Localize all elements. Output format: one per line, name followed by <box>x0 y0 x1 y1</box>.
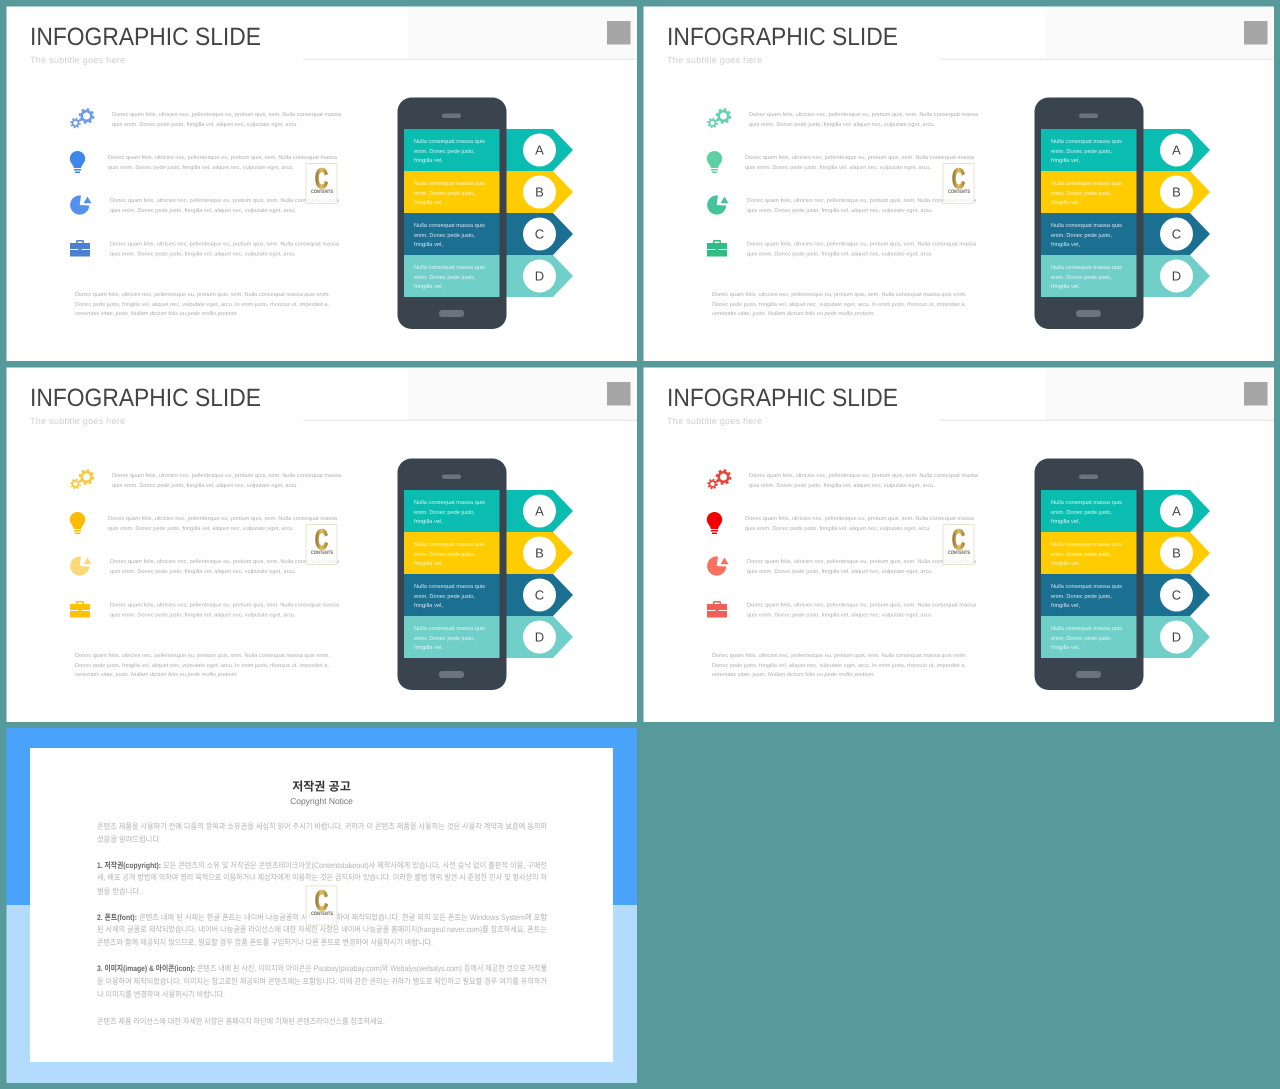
text block: summary <box>712 653 967 678</box>
watermark logo: C <box>315 163 328 194</box>
text block: row 1: Donec quam felis, ultricies nec, pellentesque eu, pretium quis, sem. Nulla consequat massa <box>112 112 341 118</box>
text block: row 3: Donec quam felis, ultricies nec, pellentesque eu, pretium quis, sem. Nulla consequat massa <box>747 198 976 204</box>
text block: row 4: Donec quam felis, ultricies nec, pellentesque eu, pretium quis, sem. Nulla consequat massa <box>110 242 339 248</box>
icon: light bulb <box>70 512 85 534</box>
notice section 3: 3. 이미지(image) & 아이콘(icon): <box>97 964 195 973</box>
text block: row 4 <box>110 602 339 618</box>
text block: row 1 <box>749 112 978 128</box>
phone: fringilla vel, <box>1051 283 1080 290</box>
arrow tabs A-D: B <box>1172 184 1181 200</box>
notice section 2: 된 서체의 글꼴로 제작되었습니다. 네이버 나눔글꼴 라이선스에 대한 자세한 사항은 네이버 나눔글꼴 홈페이지(hangeul.naver.com)를 참조하세요. 폰트는 <box>97 925 547 934</box>
text block: row 4: Donec quam felis, ultricies nec, pellentesque eu, pretium quis, sem. Nulla consequat massa <box>747 242 976 248</box>
subtitle: The subtitle goes here <box>30 416 125 426</box>
text block: row 2 <box>108 155 337 171</box>
arrow tabs A-D: D <box>535 630 544 644</box>
text block: row 1 <box>112 473 341 489</box>
watermark logo: C <box>315 885 328 916</box>
text block: row 2: quis enim. Donec pede justo, fringilla vel, aliquet nec, vulputate eget, arcu. <box>745 526 931 532</box>
phone: Nulla consequat massa quis <box>414 264 485 271</box>
notice subheading: Copyright Notice <box>290 796 353 806</box>
corner square <box>1244 21 1268 44</box>
phone: Nulla consequat massa quis <box>414 499 485 506</box>
text block: row 3: Donec quam felis, ultricies nec, pellentesque eu, pretium quis, sem. Nulla consequat massa <box>110 559 339 565</box>
corner square <box>1244 382 1268 406</box>
icon: gears <box>708 470 730 488</box>
text block: row 4: Donec quam felis, ultricies nec, pellentesque eu, pretium quis, sem. Nulla consequat massa <box>110 602 339 608</box>
text block: row 3 <box>110 198 339 214</box>
text block: row 2: Donec quam felis, ultricies nec, pellentesque eu, pretium quis, sem. Nulla consequat massa <box>108 155 337 161</box>
text block: summary: venenatis vitae, justo. Nullam dictum felis eu pede mollis pretium. <box>75 672 238 678</box>
arrow tabs A-D <box>500 129 573 297</box>
phone: enim. Donec pede justo, <box>1051 509 1112 516</box>
watermark logo: CONTENTS <box>948 189 971 195</box>
notice section 2: 2. 폰트(font): <box>97 913 137 922</box>
text block: row 1: quis enim. Donec pede justo, fringilla vel, aliquet nec, vulputate eget, arcu. <box>112 483 298 489</box>
corner square <box>607 382 630 406</box>
title: INFOGRAPHIC SLIDE <box>30 23 261 51</box>
notice section 3 <box>97 964 547 999</box>
phone: fringilla vel, <box>414 560 443 567</box>
phone: enim. Donec pede justo, <box>1051 148 1112 155</box>
notice intro: 콘텐츠 제품을 사용하기 전에 다음의 항목과 소유권을 세심히 읽어 주시기 바랍니다. 귀하가 이 콘텐츠 제품을 사용하는 것은 사용자 계약과 보증에 동의하 <box>97 822 548 831</box>
text block: row 4: Donec quam felis, ultricies nec, pellentesque eu, pretium quis, sem. Nulla consequat massa <box>747 602 976 608</box>
watermark logo <box>306 163 337 204</box>
arrow tabs A-D: B <box>1172 546 1181 560</box>
phone: enim. Donec pede justo, <box>414 232 475 239</box>
phone: Nulla consequat massa quis <box>1051 264 1122 271</box>
text block: row 4 <box>110 242 339 258</box>
arrow tabs A-D: A <box>1172 504 1181 518</box>
text block: row 1: Donec quam felis, ultricies nec, pellentesque eu, pretium quis, sem. Nulla consequat massa <box>112 473 341 479</box>
text block: summary <box>75 653 330 678</box>
text block: row 3 <box>747 559 976 575</box>
icon: light bulb <box>70 151 85 173</box>
arrow tabs A-D: D <box>1172 630 1181 644</box>
phone: enim. Donec pede justo, <box>414 190 475 197</box>
icon: pie chart <box>70 195 92 215</box>
phone <box>398 458 506 690</box>
text block: summary: Donec pede justo, fringilla vel, aliquet nec, vulputate eget, arcu. In enim justo, rhoncus ut, imperdiet a, <box>712 302 967 308</box>
arrow tabs A-D: D <box>535 268 544 284</box>
notice section 3: 콘텐츠 내에 된 사진, 이미지와 아이콘은 Pixabay(pixabay.com)와 Webalys(webalys.com) 등에서 제공한 것으로 저작물 <box>197 964 547 973</box>
phone: Nulla consequat massa quis <box>414 180 485 187</box>
slide 1: blue icons <box>6 6 637 361</box>
phone: enim. Donec pede justo, <box>1051 551 1112 558</box>
text block: summary: Donec quam felis, ultricies nec, pellentesque eu, pretium quis, sem. Nulla consequat massa quis enim. <box>712 653 967 659</box>
text block: row 2: quis enim. Donec pede justo, fringilla vel, aliquet nec, vulputate eget, arcu. <box>745 165 931 171</box>
slide 2: green icons <box>644 6 1274 361</box>
phone: Nulla consequat massa quis <box>1051 625 1122 632</box>
text block: row 2: Donec quam felis, ultricies nec, pellentesque eu, pretium quis, sem. Nulla consequat massa <box>745 516 974 522</box>
subtitle: The subtitle goes here <box>30 55 125 65</box>
phone: fringilla vel, <box>1051 602 1080 609</box>
phone: enim. Donec pede justo, <box>1051 593 1112 600</box>
arrow tabs A-D: A <box>1172 142 1181 158</box>
notice section 1: 세, 배포 공개 방법에 의하여 영리 목적으로 이용하거나 제삼자에게 이용하는 것은 금지되어 있습니다. 이러한 불법 행위 발견 시 준엄한 민사 및 형사상의 처 <box>97 873 547 882</box>
text block: summary: venenatis vitae, justo. Nullam dictum felis eu pede mollis pretium. <box>75 311 238 317</box>
icon: pie chart <box>70 556 92 576</box>
text block: row 1 <box>749 473 978 489</box>
icon: light bulb <box>707 151 722 173</box>
text block: row 3: quis enim. Donec pede justo, fringilla vel, aliquet nec, vulputate eget, arcu. <box>747 569 933 575</box>
arrow tabs A-D: A <box>535 142 544 158</box>
panel: copyright notice <box>6 728 637 1083</box>
phone: enim. Donec pede justo, <box>1051 190 1112 197</box>
watermark logo: C <box>952 524 965 555</box>
slide 4: red icons <box>644 368 1274 722</box>
notice heading: 저작권 공고 <box>292 780 351 794</box>
phone: fringilla vel, <box>414 199 443 206</box>
arrow tabs A-D: B <box>535 546 544 560</box>
icon: gears <box>71 109 93 128</box>
watermark logo <box>943 163 974 204</box>
arrow tabs A-D <box>1137 129 1210 297</box>
arrow tabs A-D <box>500 490 573 658</box>
phone: Nulla consequat massa quis <box>1051 222 1122 229</box>
arrow tabs A-D: C <box>535 226 544 242</box>
phone: Nulla consequat massa quis <box>414 541 485 548</box>
phone: fringilla vel, <box>1051 644 1080 651</box>
text block: row 2: Donec quam felis, ultricies nec, pellentesque eu, pretium quis, sem. Nulla consequat massa <box>108 516 337 522</box>
phone: enim. Donec pede justo, <box>414 593 475 600</box>
text block: summary: Donec quam felis, ultricies nec, pellentesque eu, pretium quis, sem. Nulla consequat massa quis enim. <box>75 653 330 659</box>
text block: row 3 <box>110 559 339 575</box>
text block: summary: Donec pede justo, fringilla vel, aliquet nec, vulputate eget, arcu. In enim justo, rhoncus ut, imperdiet a, <box>75 663 330 669</box>
text block: row 1: quis enim. Donec pede justo, fringilla vel, aliquet nec, vulputate eget, arcu. <box>749 483 935 489</box>
subtitle: The subtitle goes here <box>667 416 762 426</box>
slide 3: yellow icons <box>6 368 637 722</box>
watermark logo: CONTENTS <box>311 550 334 556</box>
arrow tabs A-D: C <box>535 588 544 602</box>
phone: fringilla vel, <box>414 602 443 609</box>
watermark logo: C <box>952 163 965 194</box>
notice section 3: 을 이용하여 제작되었습니다. 이미지는 참고로만 제공되며 콘텐츠에는 포함됩니다. 이에 관한 권리는 귀하가 별도로 확인하고 필요할 경우 여기를 유의하거 <box>97 977 547 986</box>
notice intro <box>97 822 548 844</box>
text block: row 1: quis enim. Donec pede justo, fringilla vel, aliquet nec, vulputate eget, arcu. <box>749 122 935 128</box>
icon: pie chart <box>707 195 728 215</box>
phone: fringilla vel, <box>414 157 443 164</box>
phone: enim. Donec pede justo, <box>414 148 475 155</box>
text block: row 3: Donec quam felis, ultricies nec, pellentesque eu, pretium quis, sem. Nulla consequat massa <box>110 198 339 204</box>
phone: enim. Donec pede justo, <box>1051 232 1112 239</box>
text block: row 4 <box>747 242 976 258</box>
arrow tabs A-D <box>1137 490 1210 658</box>
icon: pie chart <box>707 556 728 576</box>
text block: row 2 <box>108 516 337 532</box>
arrow tabs A-D: B <box>535 184 544 200</box>
subtitle: The subtitle goes here <box>667 55 762 65</box>
watermark logo <box>943 524 974 564</box>
watermark logo: CONTENTS <box>311 911 334 917</box>
phone: enim. Donec pede justo, <box>1051 274 1112 281</box>
title: INFOGRAPHIC SLIDE <box>30 384 261 412</box>
watermark logo <box>306 885 337 925</box>
phone: Nulla consequat massa quis <box>414 625 485 632</box>
text block: summary <box>712 292 967 317</box>
phone <box>1034 458 1144 690</box>
watermark logo: C <box>315 524 328 555</box>
phone: Nulla consequat massa quis <box>414 583 485 590</box>
notice section 1: 모든 콘텐츠의 소유 및 저작권은 콘텐츠테이크아웃(Contentstakeout)사 제작사에게 있습니다. 사전 승낙 없이 출판적 이용, 구매전 <box>163 861 547 870</box>
phone: fringilla vel, <box>414 644 443 651</box>
notice intro: 셨음을 알려드립니다. <box>97 835 161 844</box>
notice section 1: 벌을 받습니다. <box>97 887 141 896</box>
phone: fringilla vel, <box>1051 241 1080 248</box>
text block: row 4: quis enim. Donec pede justo, fringilla vel, aliquet nec, vulputate eget, arcu. <box>747 612 933 618</box>
text block: row 4: quis enim. Donec pede justo, fringilla vel, aliquet nec, vulputate eget, arcu. <box>110 252 296 258</box>
phone: Nulla consequat massa quis <box>1051 180 1122 187</box>
arrow tabs A-D: C <box>1172 226 1181 242</box>
icon: gears <box>71 470 93 488</box>
phone <box>398 98 506 329</box>
text block: row 3: quis enim. Donec pede justo, fringilla vel, aliquet nec, vulputate eget, arcu. <box>110 569 296 575</box>
notice section 1 <box>97 861 547 896</box>
arrow tabs A-D: C <box>1172 588 1181 602</box>
phone: Nulla consequat massa quis <box>1051 583 1122 590</box>
notice section 2: 콘텐츠와 함께 제공되지 않으므로, 필요할 경우 정품 폰트를 구입하거나 다른 폰트로 변경하여 사용하시기 바랍니다. <box>97 938 433 947</box>
icon: briefcase <box>70 240 90 256</box>
phone: fringilla vel, <box>1051 518 1080 525</box>
corner square <box>607 21 630 44</box>
phone: enim. Donec pede justo, <box>414 274 475 281</box>
text block: row 4 <box>747 602 976 618</box>
text block: summary: Donec quam felis, ultricies nec, pellentesque eu, pretium quis, sem. Nulla consequat massa quis enim. <box>712 292 967 298</box>
text block: row 4: quis enim. Donec pede justo, fringilla vel, aliquet nec, vulputate eget, arcu. <box>747 252 933 258</box>
text block: summary <box>75 292 330 317</box>
text block: row 3: quis enim. Donec pede justo, fringilla vel, aliquet nec, vulputate eget, arcu. <box>747 208 933 214</box>
text block: row 3: Donec quam felis, ultricies nec, pellentesque eu, pretium quis, sem. Nulla consequat massa <box>747 559 976 565</box>
phone: enim. Donec pede justo, <box>414 635 475 642</box>
phone: fringilla vel, <box>1051 560 1080 567</box>
text block: row 1: quis enim. Donec pede justo, fringilla vel, aliquet nec, vulputate eget, arcu. <box>112 122 298 128</box>
watermark logo: CONTENTS <box>311 189 334 195</box>
title: INFOGRAPHIC SLIDE <box>667 384 898 412</box>
text block: row 1: Donec quam felis, ultricies nec, pellentesque eu, pretium quis, sem. Nulla consequat massa <box>749 112 978 118</box>
text block: row 3 <box>747 198 976 214</box>
phone: fringilla vel, <box>414 283 443 290</box>
phone: Nulla consequat massa quis <box>1051 138 1122 145</box>
icon: gears <box>708 109 730 128</box>
text block: summary: venenatis vitae, justo. Nullam dictum felis eu pede mollis pretium. <box>712 311 875 317</box>
icon: briefcase <box>707 240 727 256</box>
text block: summary: Donec pede justo, fringilla vel, aliquet nec, vulputate eget, arcu. In enim justo, rhoncus ut, imperdiet a, <box>75 302 330 308</box>
phone: enim. Donec pede justo, <box>414 551 475 558</box>
notice closing line: 콘텐츠 제품 라이선스에 대한 자세한 사항은 홈페이지 하단에 기재된 콘텐츠라이선스를 참조하세요. <box>97 1017 385 1026</box>
phone: enim. Donec pede justo, <box>1051 635 1112 642</box>
phone: Nulla consequat massa quis <box>1051 499 1122 506</box>
notice section 3: 나 이미지를 변경하여 사용하시기 바랍니다. <box>97 990 225 999</box>
phone <box>1034 98 1144 329</box>
phone: Nulla consequat massa quis <box>414 138 485 145</box>
title: INFOGRAPHIC SLIDE <box>667 23 898 51</box>
notice section 2 <box>97 913 548 947</box>
text block: summary: Donec quam felis, ultricies nec, pellentesque eu, pretium quis, sem. Nulla consequat massa quis enim. <box>75 292 330 298</box>
phone: fringilla vel, <box>1051 157 1080 164</box>
phone: enim. Donec pede justo, <box>414 509 475 516</box>
text block: row 2 <box>745 516 974 532</box>
notice section 1: 1. 저작권(copyright): <box>97 861 161 870</box>
phone: Nulla consequat massa quis <box>414 222 485 229</box>
notice section 2: 콘텐츠 내에 된 서체는 한글 폰트는 네이버 나눔글꼴의 서체를 사용하여 제작되었습니다. 한글 외의 모든 폰트는 Windows System에 포함 <box>139 913 548 922</box>
text block: row 4: quis enim. Donec pede justo, fringilla vel, aliquet nec, vulputate eget, arcu. <box>110 612 296 618</box>
text block: row 2 <box>745 155 974 171</box>
arrow tabs A-D: D <box>1172 268 1181 284</box>
phone: fringilla vel, <box>1051 199 1080 206</box>
text block: summary: Donec pede justo, fringilla vel, aliquet nec, vulputate eget, arcu. In enim justo, rhoncus ut, imperdiet a, <box>712 663 967 669</box>
phone: fringilla vel, <box>414 518 443 525</box>
text block: row 2: quis enim. Donec pede justo, fringilla vel, aliquet nec, vulputate eget, arcu. <box>108 526 294 532</box>
text block: row 1: Donec quam felis, ultricies nec, pellentesque eu, pretium quis, sem. Nulla consequat massa <box>749 473 978 479</box>
text block: row 3: quis enim. Donec pede justo, fringilla vel, aliquet nec, vulputate eget, arcu. <box>110 208 296 214</box>
text block: row 2: Donec quam felis, ultricies nec, pellentesque eu, pretium quis, sem. Nulla consequat massa <box>745 155 974 161</box>
phone: Nulla consequat massa quis <box>1051 541 1122 548</box>
icon: briefcase <box>707 601 727 618</box>
icon: light bulb <box>707 512 722 534</box>
watermark logo <box>306 524 337 564</box>
icon: briefcase <box>70 601 90 618</box>
watermark logo: CONTENTS <box>948 550 971 556</box>
phone: fringilla vel, <box>414 241 443 248</box>
arrow tabs A-D: A <box>535 504 544 518</box>
text block: row 2: quis enim. Donec pede justo, fringilla vel, aliquet nec, vulputate eget, arcu. <box>108 165 294 171</box>
text block: row 1 <box>112 112 341 128</box>
text block: summary: venenatis vitae, justo. Nullam dictum felis eu pede mollis pretium. <box>712 672 875 678</box>
